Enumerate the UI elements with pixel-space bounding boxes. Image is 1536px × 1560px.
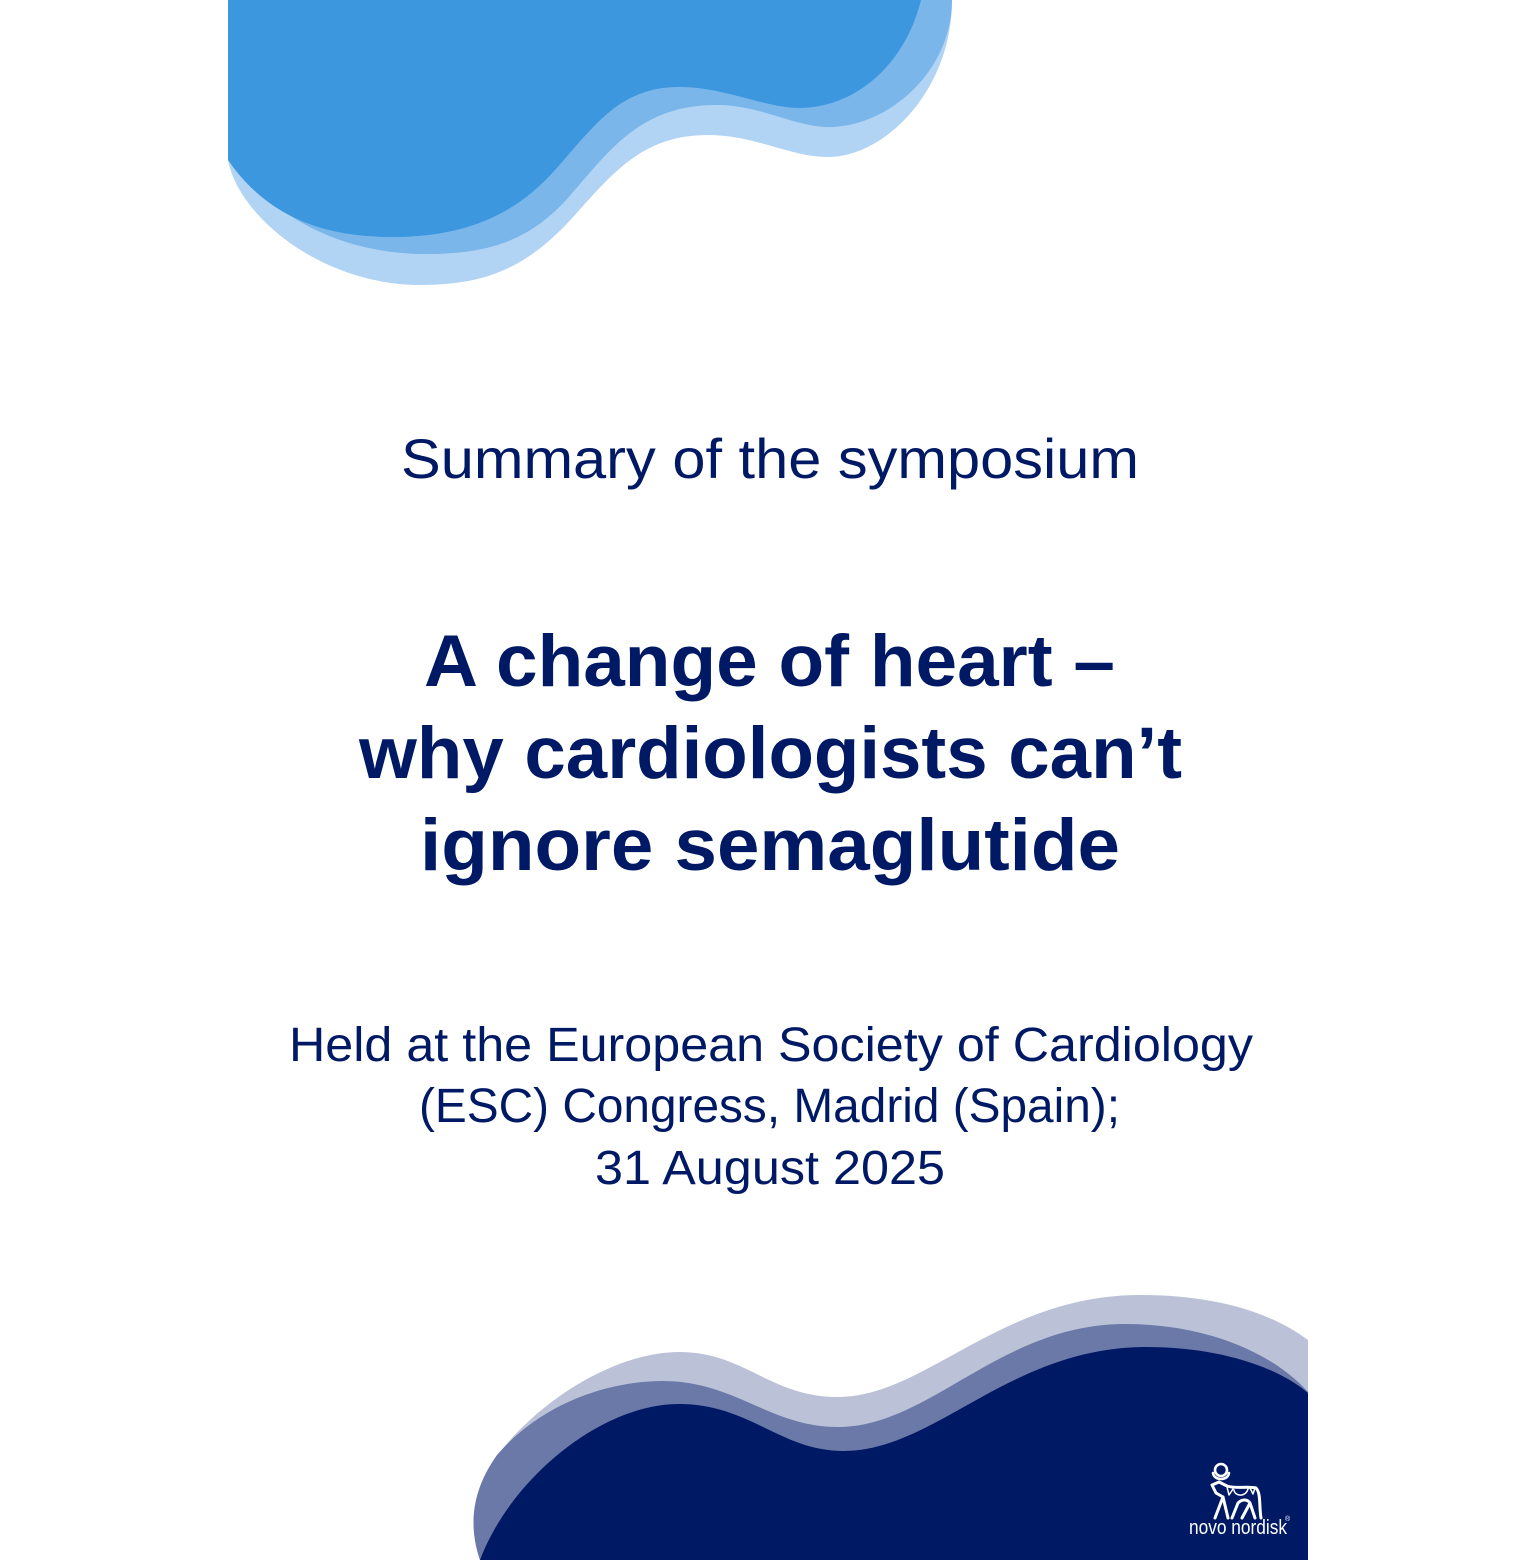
top wave decoration bbox=[228, 0, 952, 285]
event details: Held at the European Society of Cardiology bbox=[289, 1019, 1253, 1072]
event details bbox=[289, 1019, 1253, 1195]
event details: (ESC) Congress, Madrid (Spain); bbox=[419, 1080, 1120, 1133]
subtitle: summary of the symposium: Summary of the symposium bbox=[401, 427, 1139, 490]
logo wordmark: novo nordisk bbox=[1189, 1517, 1288, 1539]
main title: why cardiologists can’t bbox=[358, 713, 1182, 794]
registered mark: ® bbox=[1285, 1515, 1291, 1523]
bottom wave decoration bbox=[473, 1295, 1308, 1560]
main title: ignore semaglutide bbox=[420, 805, 1120, 886]
event details: 31 August 2025 bbox=[595, 1142, 945, 1195]
novo nordisk logo bbox=[1189, 1464, 1291, 1539]
main title: A change of heart – bbox=[424, 621, 1115, 702]
main title bbox=[358, 621, 1182, 886]
icon: apis bull with sun disc bbox=[1212, 1464, 1261, 1518]
